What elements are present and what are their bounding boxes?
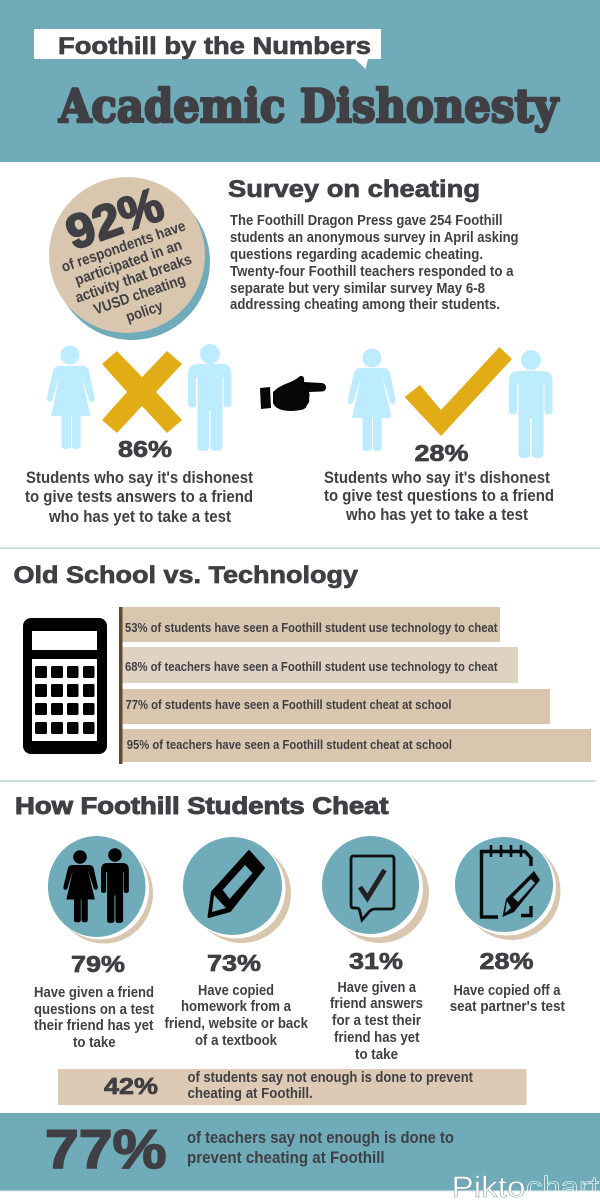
stat: 31% given answers: Have given a <box>338 979 417 996</box>
bar: 95% teachers at school <box>122 729 591 762</box>
stat: 73% copied homework: of a textbook <box>195 1032 278 1049</box>
survey description: Twenty-four Foothill teachers responded to a <box>230 263 514 280</box>
footer band: 77% of teachers: 77% <box>45 1118 166 1180</box>
survey description: questions regarding academic cheating. <box>230 246 483 263</box>
heading: survey on cheating: Survey on cheating <box>228 176 480 203</box>
stat: 73% copied homework <box>164 950 309 1049</box>
stat: 31% given answers: for a test their <box>332 1012 421 1029</box>
stat: 73% copied homework: homework from a <box>181 998 292 1015</box>
icon: male figure right <box>509 350 552 458</box>
icon: pointing hand <box>260 376 326 411</box>
bar: 95% teachers at school: 95% of teachers have seen a Foothill student cheat at school <box>127 737 452 752</box>
stat: 28% copied off partner: 28% <box>480 948 534 974</box>
survey description: separate but very similar survey May 6-8 <box>230 280 485 297</box>
bar: 53% students technology: 53% of students have seen a Foothill student use technology to cheat <box>125 620 498 635</box>
callout: 92% circle: of respondents have <box>59 218 188 276</box>
icon: gold X <box>102 351 182 433</box>
footer band: 77% of teachers: of teachers say not enough is done to <box>187 1129 454 1147</box>
stat: 31% given answers: friend has yet <box>334 1029 420 1046</box>
caption: test answers: Students who say it's dishonest <box>26 469 253 487</box>
caption: test answers: to give tests answers to a friend <box>25 488 253 506</box>
bar: 53% students technology <box>122 607 500 642</box>
speech bubble subtitle <box>34 29 381 69</box>
icon: female figure left <box>47 346 95 449</box>
icon: male figure left <box>188 344 232 451</box>
callout: 92% circle: 92% <box>60 178 170 261</box>
stat: 79% given questions <box>34 951 154 1051</box>
stat: 73% copied homework: friend, website or back <box>164 1015 309 1032</box>
stat: 79% given questions: 79% <box>71 951 125 977</box>
survey description: addressing cheating among their students. <box>230 296 500 313</box>
heading: old school vs technology: Old School vs. Technology <box>14 562 359 589</box>
callout: 92% circle: VUSD cheating <box>91 271 188 318</box>
stat: 28%: 28% <box>414 440 468 466</box>
icon: circle with check speech bubble <box>322 836 429 943</box>
stat: 31% given answers <box>330 948 423 1063</box>
caption: test questions: Students who say it's dishonest <box>324 469 550 487</box>
callout: 42% of students: cheating at Foothill. <box>188 1085 313 1102</box>
survey description: The Foothill Dragon Press gave 254 Foothill <box>230 212 502 229</box>
survey description <box>230 212 518 313</box>
icon: circle with pencil <box>183 837 291 943</box>
icon: gold check mark <box>404 347 512 436</box>
callout: 42% of students <box>58 1069 527 1105</box>
survey description: students an anonymous survey in April asking <box>230 229 518 246</box>
callout: 42% of students: 42% <box>104 1073 158 1099</box>
bar: 77% students at school <box>122 689 550 724</box>
callout: 92% circle: policy <box>124 297 166 326</box>
stat: 28% copied off partner <box>450 948 565 1015</box>
stat: 73% copied homework: Have copied <box>198 982 274 999</box>
caption: test questions <box>324 469 554 524</box>
speech bubble subtitle: Foothill by the Numbers <box>58 33 371 60</box>
footer band: 77% of teachers <box>0 1113 600 1191</box>
main title: Academic Dishonesty <box>58 79 559 133</box>
logo: Piktochart <box>452 1171 600 1200</box>
stat: 79% given questions: questions on a test <box>34 1001 154 1018</box>
callout: 92% circle: participated in an <box>73 236 184 289</box>
header banner <box>0 0 600 162</box>
footer band: 77% of teachers: prevent cheating at Foothill <box>187 1149 385 1167</box>
caption: test questions: to give test questions to a friend <box>324 487 554 505</box>
callout: 92% circle <box>49 177 210 340</box>
caption: test answers <box>25 469 253 526</box>
stat: 79% given questions: Have given a friend <box>34 984 154 1001</box>
stat: 79% given questions: to take <box>73 1034 116 1051</box>
heading: how foothill students cheat: How Foothill Students Cheat <box>15 793 388 820</box>
callout: 42% of students: of students say not enough is done to prevent <box>188 1069 473 1086</box>
caption: test questions: who has yet to take a test <box>345 506 528 524</box>
bar: 68% teachers technology <box>122 647 518 683</box>
icon: circle with people <box>48 836 153 944</box>
stat: 31% given answers: friend answers <box>330 995 423 1012</box>
caption: test answers: who has yet to take a test <box>48 508 231 526</box>
bar chart: who has seen cheating <box>119 607 591 764</box>
stat: 31% given answers: to take <box>355 1046 398 1063</box>
stat: 86%: 86% <box>118 436 172 462</box>
stat: 79% given questions: their friend has yet <box>34 1017 154 1034</box>
stat: 73% copied homework: 73% <box>207 950 261 976</box>
stat: 31% given answers: 31% <box>349 948 403 974</box>
bar: 77% students at school: 77% of students have seen a Foothill student cheat at school <box>126 697 452 712</box>
stat: 28% copied off partner: seat partner's test <box>450 998 565 1015</box>
bar: 68% teachers technology: 68% of teachers have seen a Foothill student use technology to cheat <box>125 659 498 674</box>
icon: calculator <box>23 618 107 754</box>
callout: 92% circle: activity that breaks <box>73 251 194 307</box>
icon: circle with notepad <box>455 837 560 940</box>
stat: 28% copied off partner: Have copied off a <box>454 982 561 999</box>
icon: female figure right <box>348 348 396 451</box>
